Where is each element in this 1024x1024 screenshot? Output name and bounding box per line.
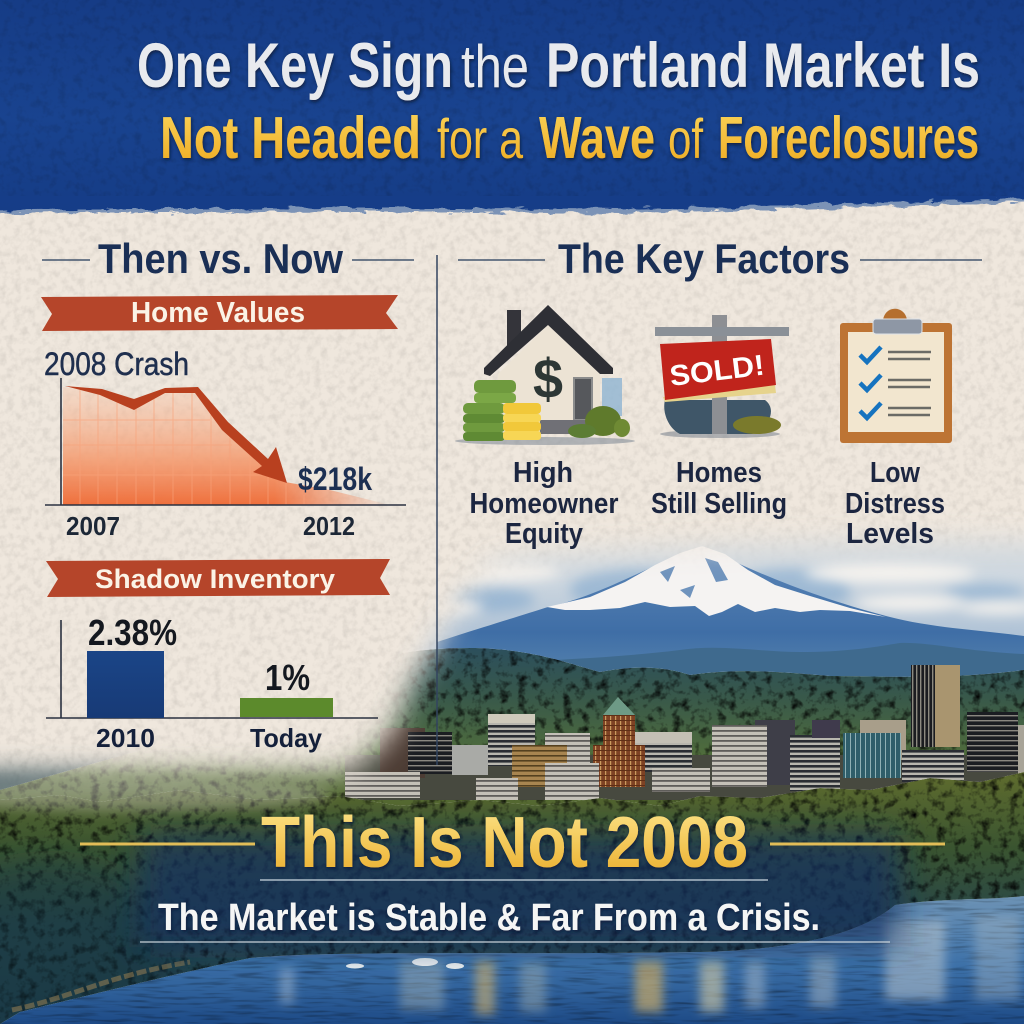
forested hills: [0, 648, 1024, 810]
label: homes still selling: Homes: [676, 457, 762, 489]
icon: sold sign: [655, 315, 789, 438]
mountain: Mount Hood: [437, 546, 1024, 690]
heading: the key factors: The Key Factors: [558, 235, 850, 282]
ribbon: shadow inventory: [46, 559, 390, 597]
label: low distress levels: Low: [870, 457, 920, 489]
axis label: 2010: 2010: [96, 723, 155, 753]
title line 1: One Key Sign: [137, 31, 453, 101]
title line 2: Not Headed: [160, 105, 421, 171]
bar chart: shadow inventory: [46, 612, 378, 753]
value: 2.38%: 2.38%: [88, 612, 177, 653]
title line 1: [137, 31, 980, 101]
column divider: [436, 255, 438, 765]
blue sky patches: [445, 568, 1024, 612]
paper background: [0, 180, 1024, 820]
ribbon: home values: [41, 295, 398, 331]
checklist rows: [860, 347, 881, 418]
clouds: [427, 563, 1024, 614]
foreground trees: [0, 772, 1024, 1024]
arrow: falling home values: [65, 386, 287, 483]
far hills: [437, 643, 1024, 720]
label: high homeowner equity: High: [513, 457, 573, 489]
icon: house with dollar and money stacks: [455, 305, 635, 445]
icon: checklist clipboard: [840, 309, 952, 443]
label: homes still selling: [651, 457, 787, 520]
label: high homeowner equity: Equity: [505, 518, 583, 550]
left tree shade: [0, 860, 180, 1024]
label: low distress levels: Levels: [846, 518, 934, 550]
heading: then vs now: Then vs. Now: [98, 235, 343, 282]
ribbon: shadow inventory: Shadow Inventory: [95, 564, 335, 594]
ribbon: home values: Home Values: [131, 297, 305, 329]
headline: this is not 2008: This Is Not 2008: [261, 803, 748, 883]
area chart: home values: [45, 378, 406, 505]
moored boats: [346, 958, 464, 969]
river: [0, 896, 1024, 1024]
sky: [0, 480, 1024, 670]
icon: sold sign: SOLD!: [668, 350, 766, 393]
label: low distress levels: [845, 457, 945, 550]
title: [137, 31, 980, 171]
axis label: 2007: 2007: [66, 511, 120, 541]
river reflections: [280, 915, 1020, 1015]
label: high homeowner equity: [470, 457, 618, 550]
title line 2: Wave: [539, 105, 655, 171]
fog on the left: [0, 779, 330, 811]
axis label: today: Today: [250, 723, 323, 753]
label: low distress levels: Distress: [845, 488, 945, 520]
label: high homeowner equity: Homeowner: [470, 488, 618, 520]
axis label: 2012: 2012: [303, 511, 355, 541]
scene base: [0, 660, 1024, 1024]
title line 1: the: [461, 33, 529, 100]
closing message: [80, 803, 945, 942]
dark text backdrop: [140, 835, 900, 947]
value: 1%: 1%: [265, 657, 310, 698]
shoreline rocks: [12, 962, 190, 1010]
scene: Portland skyline, mountain and river: [0, 480, 1024, 1024]
value: $218k: $218k: [298, 461, 372, 497]
skyline buildings: [345, 665, 1024, 800]
bar: today: [240, 698, 333, 717]
label: homes still selling: Still Selling: [651, 488, 787, 520]
panel: key factors: [455, 235, 982, 550]
panel: then vs now: [41, 235, 414, 753]
icon: house with dollar and money stacks: $: [533, 347, 563, 410]
subheading: market stable: The Market is Stable & Far From a Crisis.: [158, 897, 820, 939]
title line 2: of: [668, 107, 703, 170]
bar: 2010: [87, 651, 164, 718]
header banner: [0, 0, 1024, 214]
decorative gold rules: [80, 842, 945, 846]
title line 2: for a: [437, 107, 524, 170]
label: 2008 crash: 2008 Crash: [44, 346, 189, 382]
title line 2: [160, 105, 979, 171]
